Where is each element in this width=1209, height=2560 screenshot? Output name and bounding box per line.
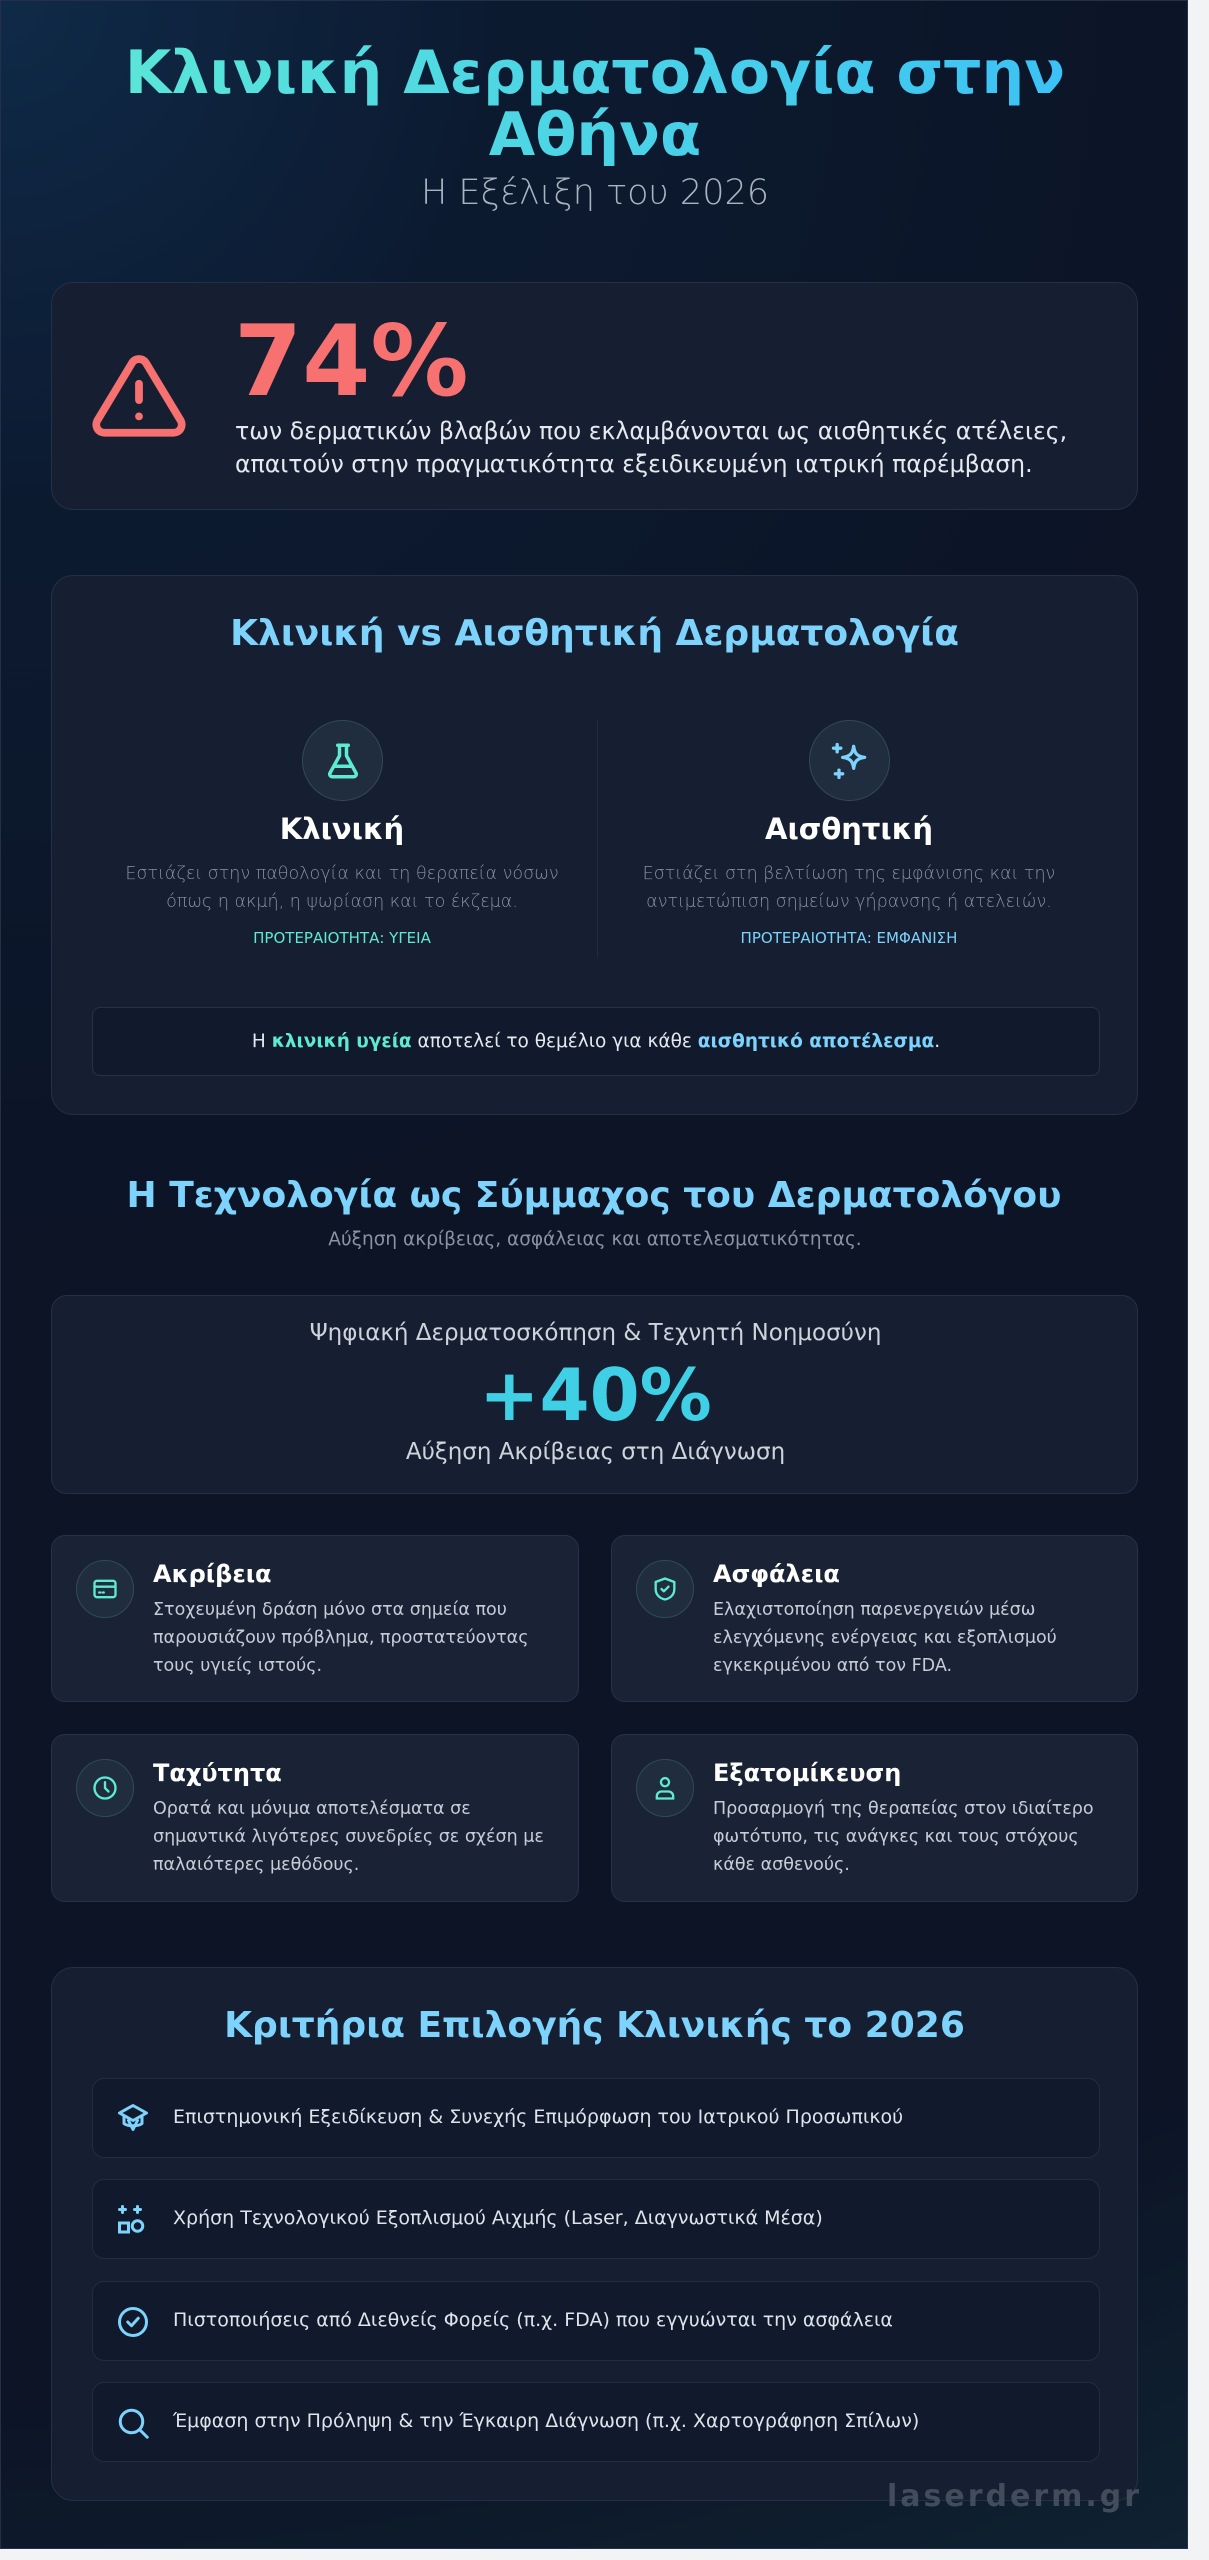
description <box>235 417 1067 478</box>
card: personalization <box>611 1734 1138 1902</box>
item 4 <box>92 2382 1100 2462</box>
icon: sparkles <box>809 720 890 801</box>
icon: shield <box>636 1560 694 1618</box>
item 4: Έμφαση στην Πρόληψη & την Έγκαιρη Διάγνωση (π.χ. Χαρτογράφηση Σπίλων) <box>173 2410 919 2432</box>
column: clinical: Εστιάζει στην παθολογία και τη θεραπεία νόσων <box>125 864 559 884</box>
card: speed: σημαντικά λιγότερες συνεδρίες σε σχέση με παλαιότερες μεθόδους. <box>153 1827 544 1875</box>
column: aesthetic: αντιμετώπιση σημείων γήρανσης ή ατελειών. <box>646 892 1052 912</box>
column: aesthetic: Αισθητική <box>765 812 933 846</box>
card: personalization: κάθε ασθενούς. <box>713 1855 850 1875</box>
icon: flask <box>302 720 383 801</box>
subtitle: Η Εξέλιξη του 2026 <box>421 173 769 213</box>
column: clinical: Κλινική <box>280 812 404 846</box>
heading: technology: Η Τεχνολογία ως Σύμμαχος του Δερματολόγου <box>127 1175 1061 1216</box>
card: speed <box>51 1734 579 1902</box>
title <box>1 42 1189 166</box>
big number: 74% <box>234 305 469 419</box>
subheading: Αύξηση ακρίβειας, ασφάλειας και αποτελεσματικότητας. <box>328 1229 862 1250</box>
icon: user <box>636 1759 694 1817</box>
card: personalization: Προσαρμογή της θεραπείας στον ιδιαίτερο <box>713 1799 1094 1819</box>
icon: card <box>76 1560 134 1618</box>
panel: +40% stat: Αύξηση Ακρίβειας στη Διάγνωση <box>406 1439 785 1465</box>
column: aesthetic: ΠΡΟΤΕΡΑΙΟΤΗΤΑ: ΕΜΦΑΝΙΣΗ <box>741 929 957 947</box>
panel: clinical vs aesthetic <box>51 575 1138 1115</box>
panel: 74% stat <box>51 282 1138 510</box>
description: απαιτούν στην πραγματικότητα εξειδικευμένη ιατρική παρέμβαση. <box>235 450 1033 478</box>
title: Κλινική Δερματολογία στην <box>125 38 1065 108</box>
callout: Η κλινική υγεία αποτελεί το θεμέλιο για κάθε αισθητικό αποτέλεσμα. <box>252 1031 940 1052</box>
card: accuracy: Στοχευμένη δράση μόνο στα σημεία που παρουσιάζουν πρόβλημα, προστατεύοντας τους υγιείς ιστούς. <box>153 1600 528 1676</box>
title: Αθήνα <box>489 100 701 170</box>
card: safety: Ελαχιστοποίηση παρενεργειών μέσω ελεγχόμενης ενέργειας και εξοπλισμού εγκεκριμένου από τον FDA. <box>713 1600 1057 1676</box>
icon: clock <box>76 1759 134 1817</box>
card: speed: Ορατά και μόνιμα αποτελέσματα σε <box>153 1799 471 1819</box>
card: safety: Ασφάλεια <box>713 1560 840 1588</box>
card: personalization: Εξατομίκευση <box>713 1759 901 1787</box>
callout <box>92 1007 1100 1076</box>
column: aesthetic <box>643 720 1055 947</box>
item 2 <box>92 2179 1100 2259</box>
icon: warning <box>92 355 186 437</box>
card: speed: Ταχύτητα <box>153 1759 282 1787</box>
card: accuracy <box>51 1535 579 1702</box>
column: aesthetic: Εστιάζει στη βελτίωση της εμφάνισης και την <box>643 864 1055 884</box>
item 1: Επιστημονική Εξειδίκευση & Συνεχής Επιμόρφωση του Ιατρικού Προσωπικού <box>173 2106 903 2128</box>
card: personalization: φωτότυπο, τις ανάγκες και τους στόχους <box>713 1827 1079 1847</box>
watermark: laserderm.gr <box>887 2479 1142 2514</box>
panel: +40% stat <box>51 1295 1138 1494</box>
item 3: Πιστοποιήσεις από Διεθνείς Φορείς (π.χ. FDA) που εγγυώνται την ασφάλεια <box>173 2309 893 2331</box>
card: accuracy: Ακρίβεια <box>153 1560 272 1588</box>
item 2: Χρήση Τεχνολογικού Εξοπλισμού Αιχμής (Laser, Διαγνωστικά Μέσα) <box>173 2207 823 2229</box>
item 1 <box>92 2078 1100 2158</box>
panel: criteria <box>51 1967 1138 2501</box>
heading: Κλινική vs Αισθητική Δερματολογία <box>230 613 959 654</box>
big number: +40% <box>479 1353 712 1437</box>
description: των δερματικών βλαβών που εκλαμβάνονται ως αισθητικές ατέλειες, <box>235 417 1067 445</box>
item 3 <box>92 2281 1100 2361</box>
card: safety <box>611 1535 1138 1702</box>
column: clinical: όπως η ακμή, η ψωρίαση και το έκζεμα. <box>166 892 518 912</box>
panel: +40% stat: Ψηφιακή Δερματοσκόπηση & Τεχνητή Νοημοσύνη <box>310 1320 881 1346</box>
column: clinical <box>125 720 559 947</box>
heading: Κριτήρια Επιλογής Κλινικής το 2026 <box>224 2005 965 2046</box>
column: clinical: ΠΡΟΤΕΡΑΙΟΤΗΤΑ: ΥΓΕΙΑ <box>253 929 431 947</box>
